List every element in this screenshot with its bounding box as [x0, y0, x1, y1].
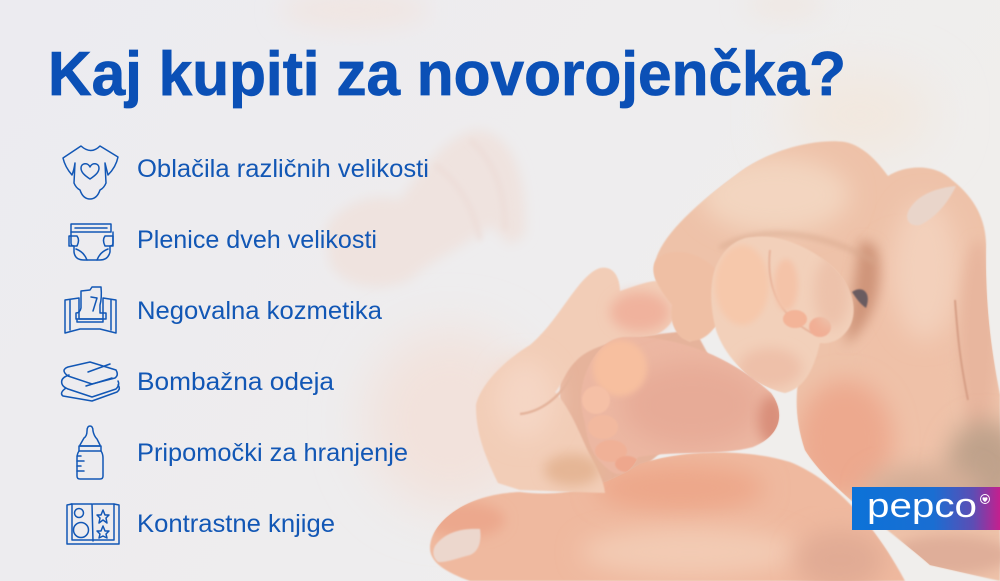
label: cosmetics: Negovalna kozmetika — [137, 297, 382, 325]
thumbnail — [907, 186, 956, 225]
left hand — [476, 268, 677, 493]
icon: folded towels — [62, 362, 119, 401]
icon: wet wipes — [65, 287, 116, 333]
lower foot — [581, 337, 786, 474]
faded baby in background — [280, 0, 935, 510]
logo: pepco — [852, 487, 1000, 530]
item: feeding — [77, 426, 408, 479]
item: clothing — [63, 146, 429, 199]
item: cotton clothes — [62, 362, 334, 401]
shadow fill between hands — [560, 330, 730, 490]
upper foot — [711, 236, 854, 393]
label: books: Kontrastne knjige — [137, 510, 335, 538]
item: books — [67, 504, 335, 544]
lower hand and thumb — [425, 452, 905, 581]
label: diapers: Plenice dveh velikosti — [137, 226, 377, 254]
thumbnail lower — [433, 529, 481, 562]
title: Kaj kupiti za novorojenčka? — [48, 40, 846, 109]
icon: baby bottle — [77, 426, 103, 479]
logo: pepco: pepco — [867, 487, 977, 525]
item: cosmetics — [65, 287, 382, 333]
icon: diaper — [69, 224, 113, 260]
icon: contrast book — [67, 504, 119, 544]
right hand — [654, 141, 1000, 581]
item: diapers — [69, 224, 377, 260]
upper hand finger — [654, 252, 716, 341]
label: clothing: Oblačila različnih velikosti — [137, 155, 429, 183]
label: feeding: Pripomočki za hranjenje — [137, 439, 408, 467]
photo: hands holding baby feet — [425, 141, 1000, 581]
label: cotton clothes: Bombažna odeja — [137, 368, 334, 396]
icon: bodysuit — [63, 146, 118, 199]
